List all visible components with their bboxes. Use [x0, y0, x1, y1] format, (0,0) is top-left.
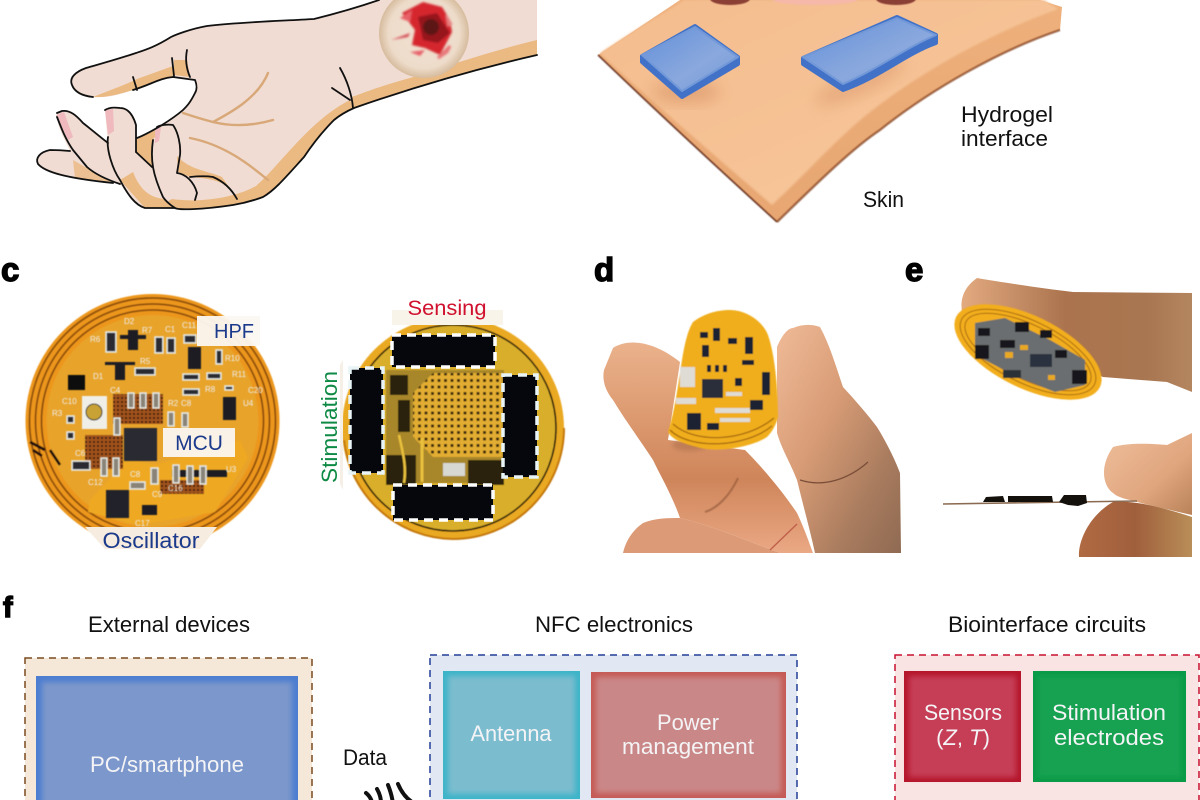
label: skin: Skin — [863, 187, 904, 212]
label: HPF: HPF — [214, 321, 254, 343]
silkscreen reference designators: D2 — [124, 317, 135, 326]
panel a: hand with wound — [37, 0, 537, 210]
silkscreen reference designators: R3 — [52, 409, 63, 418]
label: MCU — [163, 428, 235, 457]
lower-right finger — [1079, 502, 1192, 557]
label: Oscillator — [85, 527, 217, 553]
wound close-up circle — [379, 0, 469, 78]
panel label d: d — [594, 251, 614, 288]
sensing block bottom — [393, 485, 493, 520]
power management block: management — [622, 734, 754, 759]
silkscreen reference designators: U3 — [226, 465, 237, 474]
stimulation electrodes block — [1033, 671, 1186, 782]
panel d: device held between fingers — [603, 310, 901, 553]
panel e: device views — [940, 278, 1192, 557]
panel label f: f — [3, 592, 13, 624]
heading: NFC electronics: NFC electronics — [535, 612, 693, 637]
bent flex device — [668, 310, 778, 450]
silkscreen reference designators: C1 — [165, 325, 176, 334]
sensors block: Sensors — [924, 700, 1002, 725]
silkscreen reference designators — [52, 317, 263, 528]
PC/smartphone block — [36, 676, 298, 800]
silkscreen reference designators: C12 — [88, 478, 103, 487]
hand outline — [37, 0, 537, 209]
heading: external devices: External devices — [88, 612, 250, 637]
silkscreen reference designators: C6 — [75, 449, 86, 458]
panel label c: c — [1, 251, 19, 288]
external devices frame — [25, 658, 312, 800]
skin side — [598, 0, 1062, 222]
power management block — [591, 672, 786, 798]
silkscreen reference designators: R5 — [140, 357, 151, 366]
biointerface circuits frame — [895, 655, 1199, 800]
silkscreen reference designators: R11 — [232, 370, 247, 379]
silkscreen reference designators: R2 — [168, 399, 179, 408]
stimulation electrodes block: Stimulation — [1052, 700, 1166, 725]
upper thumb — [961, 278, 1192, 392]
silkscreen reference designators: D1 — [93, 372, 104, 381]
antenna block: Antenna — [470, 721, 552, 746]
soft shadows — [652, 82, 720, 102]
stimulation block right — [503, 375, 537, 477]
silkscreen reference designators: C16 — [168, 484, 183, 493]
data link waves — [366, 784, 412, 800]
silkscreen reference designators: C11 — [182, 321, 197, 330]
data link label: Data — [343, 745, 388, 770]
label: Stimulation: Stimulation — [317, 371, 342, 483]
label: Sensing: Sensing — [408, 297, 486, 320]
antenna block — [443, 671, 580, 799]
PC/smartphone block: PC/smartphone — [90, 752, 244, 777]
silkscreen reference designators: R6 — [90, 335, 101, 344]
lower finger — [623, 518, 780, 553]
right finger — [777, 325, 901, 553]
tan shadow bands — [73, 40, 537, 210]
silkscreen reference designators: R7 — [142, 326, 153, 335]
panel f: block diagram — [25, 612, 1199, 800]
silkscreen reference designators: R10 — [225, 354, 240, 363]
label: MCU: MCU — [175, 432, 223, 455]
stimulation electrodes block: electrodes — [1054, 725, 1164, 750]
label: Sensing — [392, 297, 503, 325]
trimmer pot — [82, 396, 107, 429]
hand silhouette — [37, 0, 537, 210]
sensing block top — [392, 335, 495, 367]
panel label e: e — [905, 251, 923, 288]
flex disc — [342, 317, 564, 539]
sensors block — [904, 671, 1021, 782]
fingernails — [56, 109, 161, 143]
blood — [391, 2, 452, 58]
NFC electronics frame — [430, 655, 797, 800]
hydrogel pad 1 — [642, 26, 738, 97]
panel c left: circuit top view — [26, 294, 280, 553]
panel b: skin with hydrogel patches — [598, 0, 1062, 222]
silkscreen reference designators: C9 — [152, 490, 163, 499]
panel b: skin with hydrogel patches: interface — [961, 126, 1048, 151]
silkscreen reference designators: C4 — [110, 386, 121, 395]
power management block: Power — [657, 710, 719, 735]
label: HPF — [197, 316, 260, 346]
silkscreen reference designators: C20 — [248, 386, 263, 395]
silkscreen reference designators: U4 — [243, 399, 254, 408]
silkscreen reference designators: R8 — [205, 385, 216, 394]
silkscreen reference designators: C8 — [130, 470, 141, 479]
top cut-off dots — [710, 0, 750, 5]
components — [52, 317, 263, 528]
palm creases — [183, 73, 273, 180]
label: hydrogel interface: Hydrogel — [961, 102, 1053, 127]
silkscreen reference designators: C8 — [181, 399, 192, 408]
silkscreen reference designators: C10 — [62, 397, 77, 406]
skin top — [600, 0, 1058, 205]
flex disc with antenna rings — [26, 294, 280, 548]
side-view device — [943, 495, 1137, 506]
stimulation block left — [350, 368, 383, 473]
upper-right fingertip — [1104, 433, 1192, 515]
label: Oscillator: Oscillator — [102, 528, 200, 553]
left finger — [603, 343, 813, 553]
panel c right: circuit back view — [317, 297, 564, 539]
hydrogel pad 2 — [803, 17, 936, 90]
silkscreen reference designators: C17 — [135, 519, 150, 528]
sensors block: (Z, T) — [936, 725, 990, 750]
heading: biointerface circuits: Biointerface circuits — [948, 612, 1146, 637]
tilted flexible device — [940, 285, 1116, 419]
gold mesh — [413, 373, 502, 457]
